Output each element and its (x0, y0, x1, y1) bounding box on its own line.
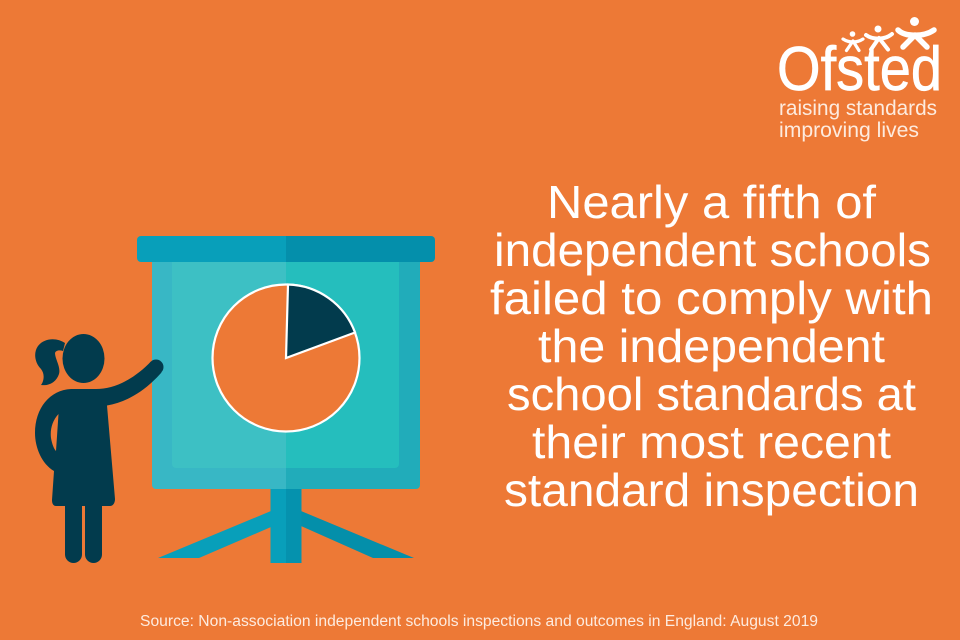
headline statement: their most recent (532, 416, 891, 468)
logo strapline (779, 97, 937, 142)
logo strapline: raising standards (779, 97, 937, 120)
logo wordmark: Ofsted (777, 35, 942, 104)
headline statement (490, 176, 933, 516)
headline statement: Nearly a fifth of (547, 176, 876, 228)
pie chart: nearly a fifth (212, 284, 360, 432)
headline statement: failed to comply with (490, 272, 933, 324)
headline statement: school standards at (507, 368, 916, 420)
girl legs (65, 505, 102, 563)
icon: projector screen with pie chart (137, 236, 435, 563)
girl body and arms (35, 362, 162, 506)
ofsted logo (777, 17, 942, 142)
logo strapline: improving lives (779, 119, 919, 142)
girl ponytail (35, 339, 65, 385)
girl head (62, 334, 104, 383)
logo figure heads (850, 17, 919, 37)
source note: Source: Non-association independent schools inspections and outcomes in England: August 2019 (140, 613, 818, 630)
screen stand (158, 488, 414, 563)
headline statement: standard inspection (504, 464, 919, 516)
headline statement: the independent (538, 320, 885, 372)
icon: girl pointing at the screen (35, 334, 164, 563)
screen top bar (137, 236, 435, 262)
logo figures (843, 30, 934, 50)
headline statement: independent schools (494, 224, 931, 276)
girl pointing hand (148, 360, 164, 374)
screen board (152, 260, 420, 489)
